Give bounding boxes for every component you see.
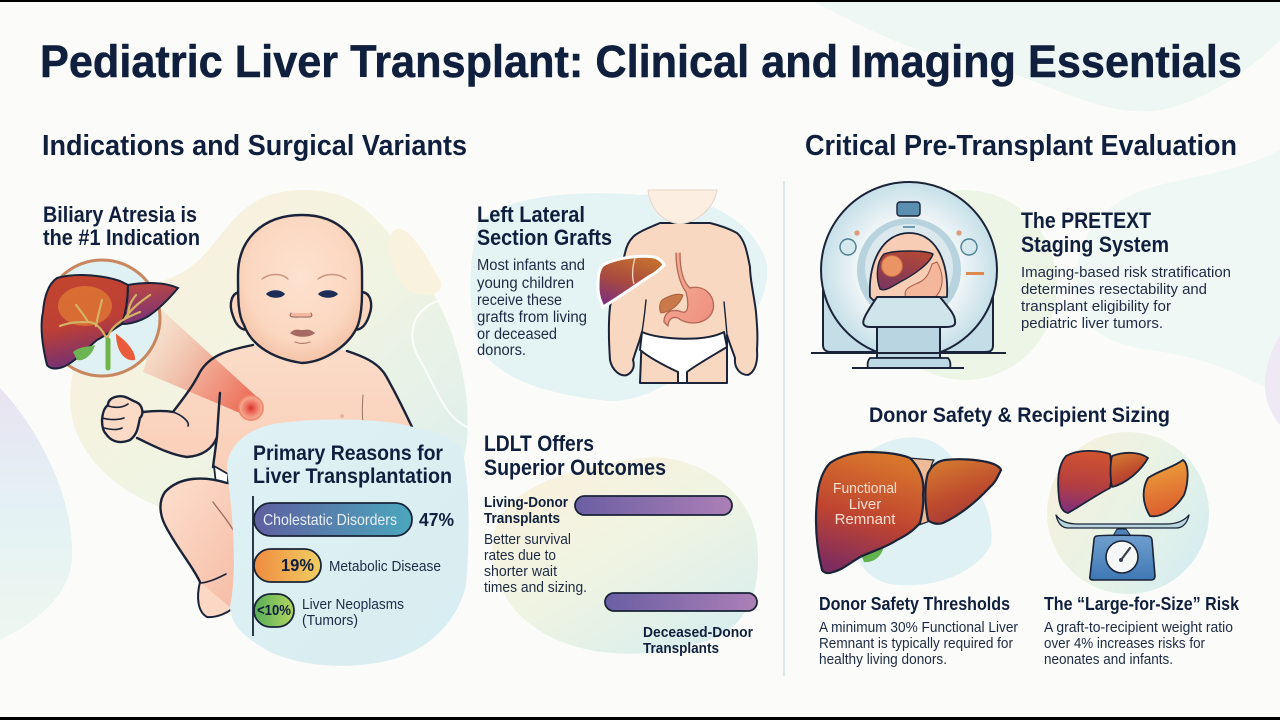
blob [1047,432,1209,594]
text: large-for-size: over 4% increases risks for [1044,636,1205,652]
heading: biliary atresia: the #1 Indication [43,225,200,250]
atretic duct [116,334,135,360]
icon: scale [1056,515,1189,580]
baby head [238,215,362,363]
text: large-for-size [1044,620,1233,668]
bar: metabolic: 19% [281,555,314,575]
heading: primary reasons: Primary Reasons for [253,441,444,465]
scanner screen [897,202,920,216]
bar: neoplasms: <10% [257,603,291,619]
text: donor thresholds: healthy living donors. [819,652,947,668]
baby mouth [290,330,315,337]
scanner table [863,297,955,327]
text: PRETEXT: pediatric liver tumors. [1021,315,1163,332]
heading: PRETEXT: Staging System [1021,232,1169,257]
bar: neoplasms: Liver Neoplasms [302,596,404,613]
heading: grafts: Section Grafts [477,225,612,250]
baby eyes [266,290,285,298]
text: grafts: grafts from living [477,309,587,326]
text: donor thresholds [819,620,1018,668]
icon: liver remnant [816,452,1001,573]
panel: large for size [1044,432,1240,668]
illustration: baby [102,215,412,617]
table pedestal [877,327,940,358]
bar: deceased donor [605,593,757,611]
blob [470,193,767,401]
baby fist [102,396,142,442]
heading: primary reasons [253,441,452,488]
label: deceased donor [643,624,753,657]
label: remnant: Functional [833,480,897,497]
target spot on baby [239,396,263,420]
panel: biliary atresia [42,190,470,666]
heading: PRETEXT: The PRETEXT [1021,208,1151,233]
text: living donor: Better survival [484,531,571,548]
diaper [214,466,228,490]
child body [609,223,757,383]
blob [873,190,1057,380]
heading: PRETEXT [1021,208,1169,257]
panel: PRETEXT [811,182,1231,380]
liver with tumor [877,251,933,290]
divider between sections [783,181,785,676]
heading: primary reasons: Liver Transplantation [253,464,452,488]
text: donor thresholds: A minimum 30% Functional Liver [819,620,1018,636]
heading: LDLT [484,431,666,480]
inset circle [44,260,160,376]
text: living donor: shorter wait [484,563,558,580]
text: grafts: receive these [477,292,562,309]
baby ears [231,292,250,330]
label: living donor: Living-Donor [484,494,568,511]
gallbladder [73,345,95,360]
remaining liver [660,294,683,313]
text: PRETEXT: determines resectability and [1021,281,1207,298]
text: PRETEXT: Imaging-based risk stratification [1021,264,1231,281]
text: living donor: times and sizing. [484,579,587,596]
background blob: right wash [1074,150,1280,395]
text: living donor: rates due to [484,547,556,564]
ligament [908,458,934,526]
icon: large graft [1144,460,1188,516]
decorative white curve [412,300,470,428]
left lobe [816,452,923,573]
liver right lobe [122,283,178,324]
liver left lobe [42,275,128,368]
right lobe [925,459,1001,524]
text: grafts: young children [477,275,574,292]
background blob: top right wash [810,0,1280,111]
text: grafts: or deceased [477,326,557,343]
bar: neoplasms: (Tumors) [302,612,358,629]
text: grafts [477,257,587,359]
bar: metabolic: Metabolic Disease [329,558,441,575]
heading: donor thresholds: Donor Safety Thresholds [819,594,1010,614]
label: remnant: Liver [849,496,881,513]
floor lines [811,353,1006,368]
icon: liver [1058,451,1148,513]
heading: donor safety and sizing: Donor Safety & Recipient Sizing [869,404,1170,427]
bar: cholestatic [254,503,454,536]
text: grafts: donors. [477,342,526,359]
heading: large-for-size: The “Large-for-Size” Risk [1044,594,1240,614]
baby outlines [137,345,412,467]
heading: LDLT: Superior Outcomes [484,455,666,480]
orange glow [58,286,112,326]
text: large-for-size: A graft-to-recipient weight ratio [1044,620,1233,636]
baby eyebrows [262,274,346,279]
panel: donor safety thresholds [816,437,1018,668]
background blob: left edge [0,388,72,640]
biliary tree [60,295,150,340]
heading: biliary atresia: Biliary Atresia is [43,202,197,227]
heading: grafts [477,202,612,250]
text: PRETEXT [1021,264,1231,332]
chart axis [252,496,254,636]
bar: metabolic [254,549,441,582]
baby body skin [137,345,412,500]
heading: grafts: Left Lateral [477,202,585,227]
baby leg [160,479,245,617]
bar: cholestatic: Cholestatic Disorders [263,512,397,529]
baby chest details [362,395,364,427]
icon: liver inset with biliary tree [42,260,178,376]
label: living donor [484,494,568,527]
heading: left section: Indications and Surgical Variants [42,130,467,162]
blob [492,457,758,654]
scanner bore [857,218,961,322]
gallbladder [860,546,884,562]
beam from spot to liver circle [143,310,257,413]
child diaper [640,332,727,383]
heading: right section: Critical Pre-Transplant Evaluation [805,130,1237,162]
text: grafts: Most infants and [477,257,585,274]
label: living donor: Transplants [484,510,560,527]
scanner lights [840,226,984,275]
illustration: MRI scanner [811,182,1006,368]
text: PRETEXT: transplant eligibility for [1021,298,1171,315]
label: deceased donor: Deceased-Donor [643,624,753,641]
text: donor thresholds: Remnant is typically required for [819,636,1013,652]
text: large-for-size: neonates and infants. [1044,652,1173,668]
child head [648,190,717,224]
bar: neoplasms [254,594,404,629]
icon: graft liver [598,256,664,307]
blob [846,437,992,585]
bar: living donor [575,496,732,515]
stomach [664,253,714,326]
bar: cholestatic: 47% [419,510,454,530]
scanner base [823,290,993,352]
background blob: right lilac edge [1265,335,1280,425]
illustration: child torso [609,190,757,383]
text: living donor [484,531,587,596]
stomach [905,262,942,298]
heading: LDLT: LDLT Offers [484,431,594,456]
table foot [868,358,950,368]
label: remnant [833,480,897,528]
heading: biliary atresia [43,202,200,250]
patient in bore [870,233,947,300]
panel blob [227,419,469,666]
scanner ring [821,182,997,358]
label: deceased donor: Transplants [643,640,719,657]
decorative side blob [390,229,441,295]
baby nose [290,313,312,317]
panel: primary reasons [227,419,469,666]
blob behind baby [70,190,468,545]
title: Pediatric Liver Transplant: Clinical and Imaging Essentials [40,36,1242,87]
label: remnant: Remnant [835,511,896,528]
panel: left lateral section grafts [470,190,767,401]
panel: LDLT [484,431,758,657]
